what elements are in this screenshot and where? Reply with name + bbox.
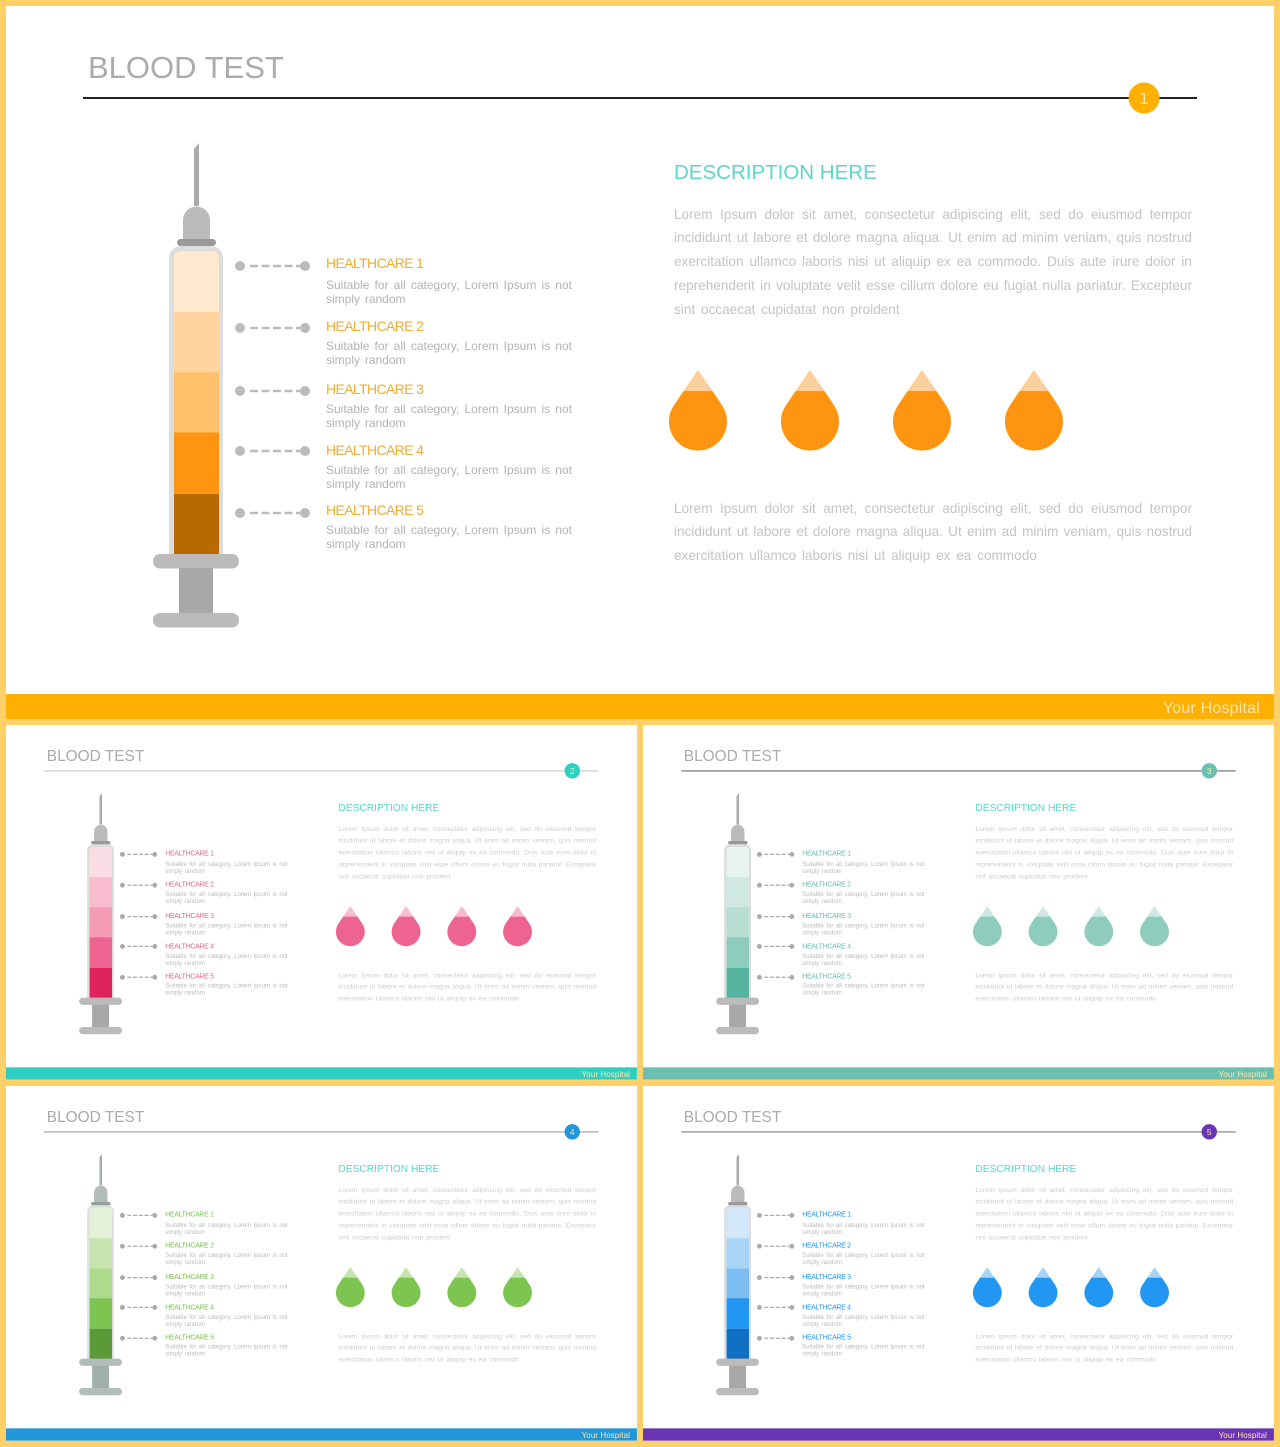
item 3 text xyxy=(165,1283,288,1297)
description paragraph xyxy=(338,1186,596,1241)
item 2 text: simply random xyxy=(802,898,842,905)
slide 5: blue panel xyxy=(643,1086,1274,1441)
item 5 text: simply random xyxy=(802,1350,842,1357)
item 3 heading: HEALTHCARE 3 xyxy=(165,1273,214,1281)
slide number: 2 xyxy=(570,766,575,776)
item 2 text xyxy=(326,339,572,367)
slide 2: pink panel xyxy=(6,725,637,1080)
item 2 text xyxy=(802,891,925,905)
description paragraph: exercitation ullamco laboris nisi ut aliquip ex ea commodo. Duis aute irure dolor in xyxy=(338,1209,596,1217)
item 1 heading: HEALTHCARE 1 xyxy=(165,1210,214,1218)
second paragraph xyxy=(674,500,1192,563)
title: BLOOD TEST xyxy=(684,1108,781,1125)
item 5 text: Suitable for all category, Lorem Ipsum is not xyxy=(802,1343,925,1350)
syringe, leaders, drops and header rule xyxy=(44,763,599,1034)
description paragraph: incididunt ut labore et dolore magna aliqua. Ut enim ad minim veniam, quis nostrud xyxy=(338,1198,596,1205)
item 3 heading: HEALTHCARE 3 xyxy=(326,381,423,397)
second paragraph: exercitation ullamco laboris nisi ut aliquip ex ea commodo xyxy=(975,995,1156,1002)
item 2 text xyxy=(165,1252,288,1266)
second paragraph: exercitation ullamco laboris nisi ut aliquip ex ea commodo xyxy=(338,995,519,1002)
item 1 text xyxy=(165,1221,288,1236)
item 1 text: Suitable for all category, Lorem Ipsum is not xyxy=(165,860,288,867)
description paragraph: sint occaecat cupidatat non proident xyxy=(338,872,451,880)
item 2 text: Suitable for all category, Lorem Ipsum is not xyxy=(802,1252,925,1259)
item 4 heading: HEALTHCARE 4 xyxy=(802,1303,851,1311)
description paragraph: sint occaecat cupidatat non proident xyxy=(674,302,900,317)
item 4 heading: HEALTHCARE 4 xyxy=(165,1303,214,1311)
item 1 text: Suitable for all category, Lorem Ipsum is not xyxy=(802,860,925,867)
second paragraph: incididunt ut labore et dolore magna aliqua. Ut enim ad minim veniam, quis nostrud xyxy=(975,1344,1233,1351)
description paragraph: Lorem Ipsum dolor sit amet, consectetur adipiscing elit, sed do eiusmod tempor xyxy=(338,1186,596,1193)
syringe, leaders, drops and header rule xyxy=(681,1124,1236,1396)
second paragraph: exercitation ullamco laboris nisi ut aliquip ex ea commodo xyxy=(975,1356,1156,1363)
item 2 text: Suitable for all category, Lorem Ipsum is not xyxy=(326,339,572,353)
footer bar xyxy=(6,1428,637,1441)
item 3 text: simply random xyxy=(165,1290,205,1297)
slide number: 4 xyxy=(570,1127,575,1137)
second paragraph: incididunt ut labore et dolore magna aliqua. Ut enim ad minim veniam, quis nostrud xyxy=(674,524,1192,539)
item 5 heading: HEALTHCARE 5 xyxy=(165,972,214,980)
item 4 text: simply random xyxy=(802,960,842,967)
second paragraph: Lorem Ipsum dolor sit amet, consectetur adipiscing elit, sed do eiusmod tempor xyxy=(338,1332,596,1340)
item 3 text: Suitable for all category, Lorem Ipsum is not xyxy=(326,402,572,416)
description paragraph: reprehenderit in voluptate velit esse cillum dolore eu fugiat nulla pariatur. Excepteur xyxy=(674,278,1192,293)
item 2 text: Suitable for all category, Lorem Ipsum is not xyxy=(165,1252,288,1259)
item 3 text xyxy=(802,922,925,936)
item 1 heading: HEALTHCARE 1 xyxy=(326,255,423,271)
item 5 text xyxy=(802,1343,925,1357)
item 4 text: simply random xyxy=(165,960,205,967)
item 2 heading: HEALTHCARE 2 xyxy=(165,880,214,888)
second paragraph xyxy=(338,1332,596,1363)
syringe, leaders, drops and header rule xyxy=(681,763,1236,1034)
item 4 text: simply random xyxy=(165,1321,205,1328)
item 5 heading: HEALTHCARE 5 xyxy=(326,502,423,518)
description paragraph: incididunt ut labore et dolore magna aliqua. Ut enim ad minim veniam, quis nostrud xyxy=(674,230,1192,245)
item 2 text: simply random xyxy=(165,1259,205,1266)
item 3 text: simply random xyxy=(802,929,842,936)
item 3 text: Suitable for all category, Lorem Ipsum is not xyxy=(165,1283,288,1290)
description paragraph: reprehenderit in voluptate velit esse cillum dolore eu fugiat nulla pariatur. Excepteur xyxy=(338,1221,596,1229)
item 1 text: simply random xyxy=(326,292,406,306)
syringe, leaders, drops and header rule xyxy=(83,82,1197,628)
description paragraph: reprehenderit in voluptate velit esse cillum dolore eu fugiat nulla pariatur. Excepteur xyxy=(975,860,1233,868)
footer label: Your Hospital xyxy=(1219,1431,1267,1440)
item 1 heading: HEALTHCARE 1 xyxy=(802,849,851,857)
slide number: 3 xyxy=(1207,766,1212,776)
item 1 text xyxy=(326,278,572,306)
second paragraph: incididunt ut labore et dolore magna aliqua. Ut enim ad minim veniam, quis nostrud xyxy=(975,983,1233,990)
second paragraph: exercitation ullamco laboris nisi ut aliquip ex ea commodo xyxy=(338,1356,519,1363)
item 4 text: Suitable for all category, Lorem Ipsum is not xyxy=(165,952,288,959)
item 4 heading: HEALTHCARE 4 xyxy=(802,942,851,950)
item 2 text xyxy=(165,891,288,905)
description paragraph: Lorem Ipsum dolor sit amet, consectetur adipiscing elit, sed do eiusmod tempor xyxy=(674,206,1192,222)
item 1 text xyxy=(802,860,925,874)
item 5 text: Suitable for all category, Lorem Ipsum is not xyxy=(165,1343,288,1350)
item 5 text: Suitable for all category, Lorem Ipsum is not xyxy=(165,982,288,989)
item 3 heading: HEALTHCARE 3 xyxy=(802,1273,851,1281)
item 4 heading: HEALTHCARE 4 xyxy=(326,442,423,458)
description paragraph: exercitation ullamco laboris nisi ut aliquip ex ea commodo. Duis aute irure dolor in xyxy=(674,254,1192,269)
description paragraph: exercitation ullamco laboris nisi ut aliquip ex ea commodo. Duis aute irure dolor in xyxy=(975,1209,1233,1217)
item 5 text: simply random xyxy=(165,989,205,996)
item 2 heading: HEALTHCARE 2 xyxy=(802,1241,851,1249)
item 3 text xyxy=(165,922,288,936)
second paragraph: Lorem Ipsum dolor sit amet, consectetur adipiscing elit, sed do eiusmod tempor xyxy=(975,971,1233,979)
item 1 text: simply random xyxy=(165,1229,205,1235)
description paragraph: reprehenderit in voluptate velit esse cillum dolore eu fugiat nulla pariatur. Excepteur xyxy=(975,1221,1233,1229)
item 4 text xyxy=(165,952,288,967)
item 5 heading: HEALTHCARE 5 xyxy=(802,1333,851,1341)
description paragraph: incididunt ut labore et dolore magna aliqua. Ut enim ad minim veniam, quis nostrud xyxy=(975,837,1233,844)
item 1 text xyxy=(802,1221,925,1236)
item 1 text: simply random xyxy=(802,1229,842,1235)
description paragraph xyxy=(338,825,596,880)
syringe, leaders, drops and header rule xyxy=(44,1124,599,1396)
description paragraph: Lorem Ipsum dolor sit amet, consectetur adipiscing elit, sed do eiusmod tempor xyxy=(975,825,1233,832)
description paragraph: sint occaecat cupidatat non proident xyxy=(975,872,1088,880)
item 1 text: simply random xyxy=(165,868,205,874)
description paragraph xyxy=(975,1186,1233,1241)
second paragraph xyxy=(338,971,596,1002)
item 4 text: Suitable for all category, Lorem Ipsum is not xyxy=(802,1313,925,1320)
footer bar xyxy=(643,1067,1274,1080)
second paragraph: Lorem Ipsum dolor sit amet, consectetur adipiscing elit, sed do eiusmod tempor xyxy=(674,500,1192,516)
description paragraph: incididunt ut labore et dolore magna aliqua. Ut enim ad minim veniam, quis nostrud xyxy=(975,1198,1233,1205)
item 5 text xyxy=(165,1343,288,1357)
item 2 heading: HEALTHCARE 2 xyxy=(165,1241,214,1249)
item 5 text: simply random xyxy=(802,989,842,996)
item 3 text: simply random xyxy=(802,1290,842,1297)
description paragraph xyxy=(975,825,1233,880)
item 4 text xyxy=(802,1313,925,1328)
item 2 text xyxy=(802,1252,925,1266)
item 5 text xyxy=(326,523,572,551)
title: BLOOD TEST xyxy=(47,747,144,764)
item 1 heading: HEALTHCARE 1 xyxy=(165,849,214,857)
slide number: 1 xyxy=(1139,89,1149,108)
item 5 text: Suitable for all category, Lorem Ipsum is not xyxy=(326,523,572,537)
item 1 text: Suitable for all category, Lorem Ipsum is not xyxy=(165,1221,288,1228)
description paragraph: incididunt ut labore et dolore magna aliqua. Ut enim ad minim veniam, quis nostrud xyxy=(338,837,596,844)
second paragraph: Lorem Ipsum dolor sit amet, consectetur adipiscing elit, sed do eiusmod tempor xyxy=(338,971,596,979)
footer bar xyxy=(6,1067,637,1080)
description paragraph: Lorem Ipsum dolor sit amet, consectetur adipiscing elit, sed do eiusmod tempor xyxy=(338,825,596,832)
item 3 heading: HEALTHCARE 3 xyxy=(165,912,214,920)
footer label: Your Hospital xyxy=(1163,700,1260,717)
item 2 text: simply random xyxy=(802,1259,842,1266)
description paragraph: sint occaecat cupidatat non proident xyxy=(975,1233,1088,1241)
item 5 heading: HEALTHCARE 5 xyxy=(802,972,851,980)
second paragraph: exercitation ullamco laboris nisi ut aliquip ex ea commodo xyxy=(674,548,1037,563)
item 2 text: simply random xyxy=(326,353,406,367)
item 1 text: Suitable for all category, Lorem Ipsum is not xyxy=(326,278,572,292)
item 4 text: Suitable for all category, Lorem Ipsum is not xyxy=(802,952,925,959)
footer label: Your Hospital xyxy=(582,1431,630,1440)
item 5 text xyxy=(165,982,288,996)
item 4 text xyxy=(802,952,925,967)
title: BLOOD TEST xyxy=(684,747,781,764)
slide 3: teal panel xyxy=(643,725,1274,1080)
description paragraph: exercitation ullamco laboris nisi ut aliquip ex ea commodo. Duis aute irure dolor in xyxy=(975,848,1233,856)
footer bar xyxy=(6,694,1274,719)
item 2 text: Suitable for all category, Lorem Ipsum is not xyxy=(165,891,288,898)
item 4 text xyxy=(165,1313,288,1328)
item 3 text xyxy=(802,1283,925,1297)
item 3 text: simply random xyxy=(165,929,205,936)
item 3 text: Suitable for all category, Lorem Ipsum is not xyxy=(802,922,925,929)
item 5 text: simply random xyxy=(326,537,406,551)
description heading: DESCRIPTION HERE xyxy=(338,1163,439,1175)
item 1 text: simply random xyxy=(802,868,842,874)
item 2 text: simply random xyxy=(165,898,205,905)
item 5 heading: HEALTHCARE 5 xyxy=(165,1333,214,1341)
item 2 text: Suitable for all category, Lorem Ipsum is not xyxy=(802,891,925,898)
title: BLOOD TEST xyxy=(88,50,284,85)
slide 1: orange main panel xyxy=(6,6,1274,719)
footer label: Your Hospital xyxy=(582,1070,630,1079)
item 4 text: simply random xyxy=(802,1321,842,1328)
item 4 heading: HEALTHCARE 4 xyxy=(165,942,214,950)
item 3 text xyxy=(326,402,572,430)
item 5 text xyxy=(802,982,925,996)
item 4 text: Suitable for all category, Lorem Ipsum is not xyxy=(165,1313,288,1320)
second paragraph: Lorem Ipsum dolor sit amet, consectetur adipiscing elit, sed do eiusmod tempor xyxy=(975,1332,1233,1340)
description heading: DESCRIPTION HERE xyxy=(674,161,877,184)
item 1 text xyxy=(165,860,288,874)
item 4 text xyxy=(326,463,572,491)
slide 4: green panel xyxy=(6,1086,637,1441)
item 3 text: Suitable for all category, Lorem Ipsum is not xyxy=(165,922,288,929)
description paragraph: Lorem Ipsum dolor sit amet, consectetur adipiscing elit, sed do eiusmod tempor xyxy=(975,1186,1233,1193)
item 2 heading: HEALTHCARE 2 xyxy=(802,880,851,888)
description paragraph: reprehenderit in voluptate velit esse cillum dolore eu fugiat nulla pariatur. Excepteur xyxy=(338,860,596,868)
item 1 text: Suitable for all category, Lorem Ipsum is not xyxy=(802,1221,925,1228)
item 5 text: Suitable for all category, Lorem Ipsum is not xyxy=(802,982,925,989)
item 1 heading: HEALTHCARE 1 xyxy=(802,1210,851,1218)
second paragraph: incididunt ut labore et dolore magna aliqua. Ut enim ad minim veniam, quis nostrud xyxy=(338,983,596,990)
item 3 text: Suitable for all category, Lorem Ipsum is not xyxy=(802,1283,925,1290)
description heading: DESCRIPTION HERE xyxy=(338,802,439,814)
footer bar xyxy=(643,1428,1274,1441)
description heading: DESCRIPTION HERE xyxy=(975,1163,1076,1175)
slide number: 5 xyxy=(1207,1127,1212,1137)
description paragraph: sint occaecat cupidatat non proident xyxy=(338,1233,451,1241)
item 2 heading: HEALTHCARE 2 xyxy=(326,318,423,334)
title: BLOOD TEST xyxy=(47,1108,144,1125)
footer label: Your Hospital xyxy=(1219,1070,1267,1079)
item 3 heading: HEALTHCARE 3 xyxy=(802,912,851,920)
description paragraph: exercitation ullamco laboris nisi ut aliquip ex ea commodo. Duis aute irure dolor in xyxy=(338,848,596,856)
item 4 text: Suitable for all category, Lorem Ipsum is not xyxy=(326,463,572,477)
item 4 text: simply random xyxy=(326,477,406,491)
second paragraph: incididunt ut labore et dolore magna aliqua. Ut enim ad minim veniam, quis nostrud xyxy=(338,1344,596,1351)
description paragraph xyxy=(674,206,1192,317)
item 5 text: simply random xyxy=(165,1350,205,1357)
second paragraph xyxy=(975,971,1233,1002)
description heading: DESCRIPTION HERE xyxy=(975,802,1076,814)
item 3 text: simply random xyxy=(326,416,406,430)
second paragraph xyxy=(975,1332,1233,1363)
